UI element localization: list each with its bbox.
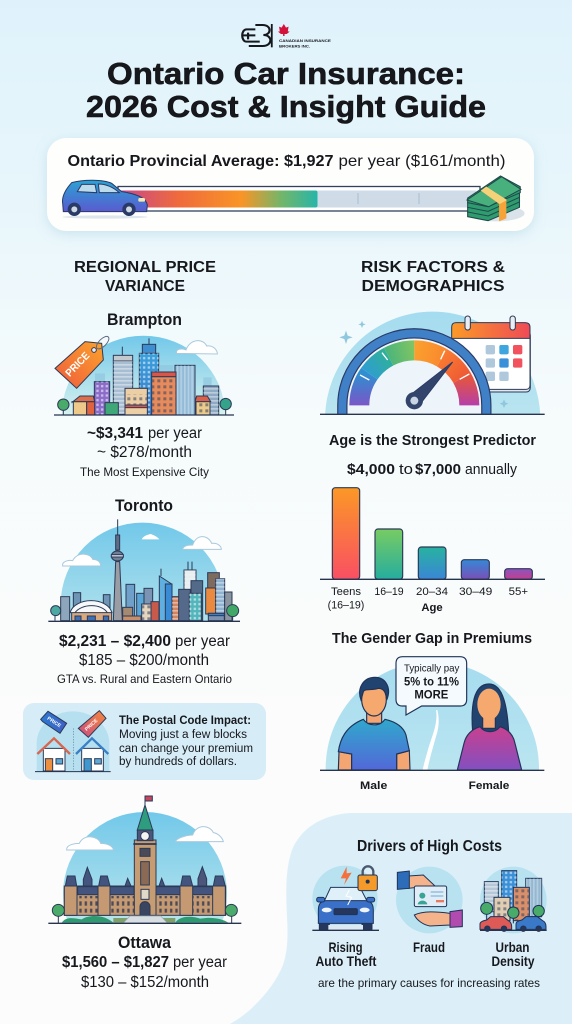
postal code text: Moving just a few blocks (119, 729, 247, 741)
axis labels: 55+ (509, 586, 528, 598)
drivers heading: Drivers of High Costs (357, 838, 502, 855)
heading: risk factors and demographics: RISK FACTORS & (361, 259, 505, 276)
speech bubble: 5% to 11% (404, 675, 459, 689)
Toronto pricing text: per year (175, 633, 230, 650)
urban density label: Urban (496, 939, 530, 955)
postal code text: can change your premium (119, 743, 253, 755)
callout: postal code impact (23, 703, 266, 780)
heading: regional price variance: VARIANCE (105, 278, 185, 295)
age annual range: $4,000 (347, 462, 395, 478)
gender labels (360, 780, 509, 792)
age annual range: to (399, 462, 413, 478)
axis labels: Age (421, 602, 443, 614)
Toronto pricing text: $2,231 – $2,400 (59, 633, 171, 650)
bar: Teens (332, 488, 360, 579)
illustration: Brampton skyline with price tag (54, 334, 234, 415)
logo: Canadian Insurance Brokers Inc. (242, 24, 331, 48)
illustration: Parliament Hill (48, 796, 242, 924)
gauge (342, 333, 486, 414)
provincial average text: Ontario Provincial Average: $1,927 (68, 153, 334, 170)
bar chart: premium by age (320, 488, 545, 614)
rising auto theft label: Auto Theft (316, 953, 377, 969)
logo: Canadian Insurance Brokers Inc.: BROKERS INC. (279, 44, 310, 48)
age annual range: $7,000 (415, 462, 461, 478)
title: Ontario Car Insurance: (107, 57, 465, 91)
provincial average text: per year ($161/month) (338, 153, 506, 170)
bar: 20-34 (418, 547, 446, 579)
age annual range: annually (465, 462, 518, 478)
logo: Canadian Insurance Brokers Inc.: CANADIAN INSURANCE (279, 38, 331, 43)
icon: urban density (480, 867, 547, 933)
postal code text: The Postal Code Impact: (119, 715, 251, 727)
heading: risk factors and demographics (361, 259, 505, 295)
illustration: gauge and calendar (320, 312, 545, 415)
icon: two houses with price tags (35, 711, 111, 772)
Ottawa pricing text (62, 934, 227, 991)
icon: two houses with price tags: PRICE (84, 717, 100, 733)
title (86, 57, 486, 124)
axis labels: Teens (331, 586, 361, 598)
Toronto pricing text: GTA vs. Rural and Eastern Ontario (57, 672, 232, 686)
provincial average text (68, 153, 506, 170)
Ottawa pricing text: Ottawa (118, 934, 172, 952)
icon: fraud (396, 867, 463, 933)
speech bubble (396, 657, 467, 715)
panel: drivers of high costs (230, 813, 572, 1024)
Brampton pricing text: The Most Expensive City (80, 465, 209, 479)
Brampton pricing text (80, 425, 209, 479)
axis labels: 30–49 (459, 586, 492, 598)
bar: 30-49 (461, 560, 489, 579)
Toronto pricing text: $185 – $200/month (79, 652, 209, 669)
icon: stack of money (467, 176, 525, 221)
female figure (457, 684, 522, 770)
Toronto heading: Toronto (115, 496, 173, 515)
axis labels: 20–34 (416, 586, 448, 598)
heading: risk factors and demographics: DEMOGRAPHICS (362, 278, 505, 295)
icon: two houses with price tags: PRICE (46, 716, 62, 730)
Brampton pricing text: ~ $278/month (97, 444, 192, 461)
Toronto pricing text (57, 633, 232, 686)
gender labels: Male (360, 780, 387, 792)
postal code text: by hundreds of dollars. (119, 756, 237, 768)
progress bar (118, 186, 480, 211)
male figure (338, 677, 410, 770)
Ottawa pricing text: per year (173, 954, 227, 971)
icon: blue car (62, 180, 148, 219)
bar: 55+ (505, 569, 532, 579)
speech bubble: MORE (414, 688, 448, 702)
postal code text (119, 715, 253, 768)
panel: Ottawa (48, 796, 241, 991)
urban density label: Density (492, 953, 535, 969)
heading: regional price variance (74, 259, 216, 295)
axis labels: (16–19) (328, 599, 365, 611)
axis labels (328, 586, 528, 614)
fraud label: Fraud (413, 939, 445, 955)
urban density label (492, 939, 535, 969)
illustration: Toronto skyline (48, 519, 240, 622)
Brampton pricing text: ~$3,341 (87, 425, 143, 442)
panel: Brampton (54, 310, 234, 479)
title: 2026 Cost & Insight Guide (86, 90, 486, 124)
Ottawa pricing text: $130 – $152/month (81, 974, 209, 991)
drivers caption: are the primary causes for increasing rates (318, 976, 540, 990)
heading: regional price variance: REGIONAL PRICE (74, 259, 216, 276)
rising auto theft label (316, 939, 377, 969)
gender labels: Female (469, 780, 509, 792)
Brampton heading: Brampton (107, 310, 182, 329)
Ottawa pricing text: $1,560 – $1,827 (62, 954, 169, 971)
age annual range (347, 462, 518, 478)
icon: rising auto theft (312, 866, 379, 931)
panel: Toronto (48, 496, 240, 686)
Brampton pricing text: per year (148, 425, 202, 442)
calendar (452, 316, 530, 392)
gender heading: The Gender Gap in Premiums (332, 630, 532, 647)
axis labels: 16–19 (374, 586, 404, 598)
illustration: Brampton skyline with price tag: PRICE (63, 350, 92, 379)
bar: 16-19 (375, 529, 403, 579)
illustration: male and female gender gap (320, 656, 544, 789)
speech bubble: Typically pay (404, 664, 460, 675)
age heading: Age is the Strongest Predictor (329, 433, 536, 449)
panel: provincial average (47, 138, 534, 231)
rising auto theft label: Rising (328, 939, 362, 955)
